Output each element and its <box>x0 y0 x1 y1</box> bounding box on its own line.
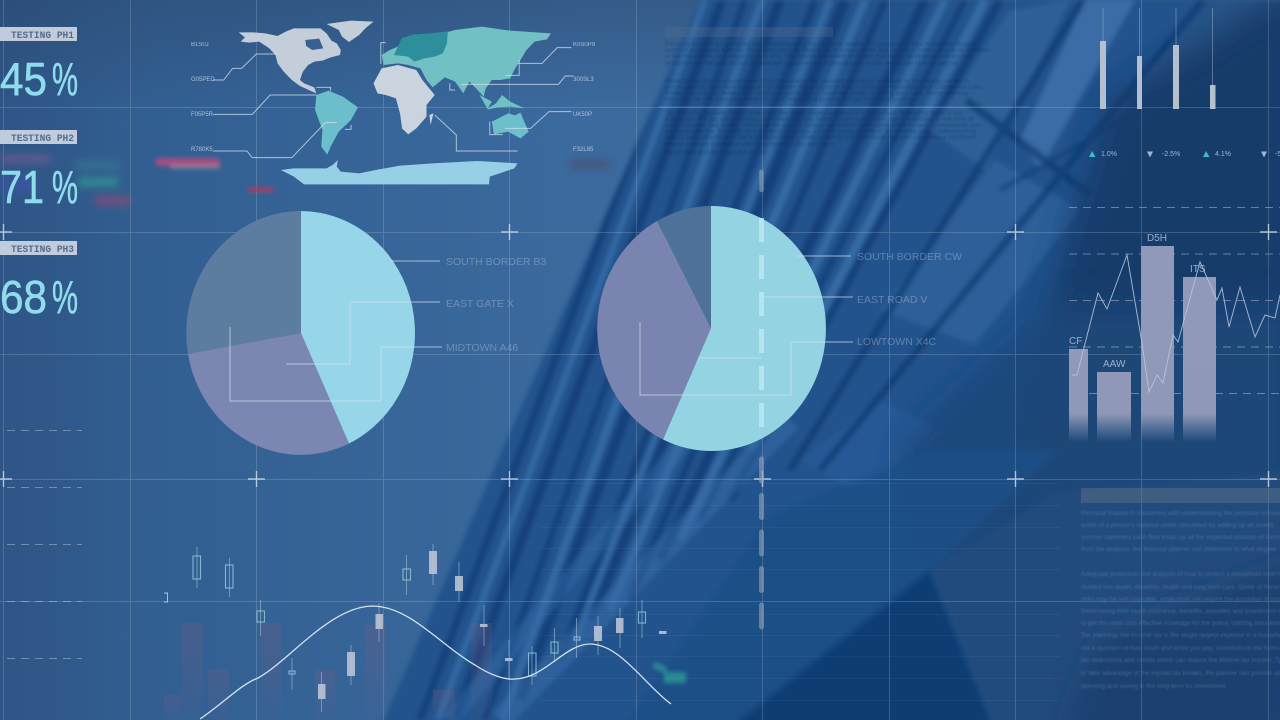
top centre text block: and household cash flow. Adequate protection: the analysis of how to protect a household from unforeseen risks <box>665 84 982 91</box>
pie chart 2 <box>597 206 962 451</box>
map labels: G05PED <box>191 77 215 83</box>
map labels: K0S0P9 <box>573 42 596 48</box>
phase 3 value <box>0 271 78 323</box>
top centre text block: a progressive tax. Typically, as one's income grows, a higher marginal rate of tax must be paid. Understanding <box>665 128 977 135</box>
top centre text block: risks may be self-insurable, while most will require the purchase of an insurance contract <box>665 96 916 103</box>
map labels: F05P5R <box>191 112 214 118</box>
left dashed scale <box>7 430 82 658</box>
phase 3 tag <box>0 241 77 256</box>
top centre text block: how to take advantage of the myriad tax breaks when planning one's personal finances can make a significant <box>665 134 976 141</box>
top right delta indicators <box>1089 151 1280 158</box>
pie 1 connectors <box>230 261 442 401</box>
top centre text block: These risks can be divided into liability, property, death, disability, health and long term care. Some of these <box>665 90 968 97</box>
top centre text block: Personal finance is concerned with understanding the personal wealth of a person and their household budget <box>665 41 976 48</box>
phase 1 value <box>0 53 78 105</box>
pie 2 connectors <box>640 256 853 395</box>
New Zealand <box>541 137 549 146</box>
top centre text block: impact in which it can later save you money in the long term <box>665 141 834 148</box>
bar labels: ITS <box>1190 264 1206 275</box>
phase 3 value: 68 <box>0 271 47 323</box>
bar labels: AAW <box>1103 359 1126 370</box>
small bracket <box>164 593 168 602</box>
pie 2 labels: SOUTH BORDER CW <box>857 251 962 263</box>
right bar and line chart <box>1069 208 1280 442</box>
phase 3 value: % <box>52 271 78 323</box>
pie chart 1 <box>186 211 547 455</box>
Antarctica <box>281 160 518 184</box>
top centre text block: of the household, at a single point in time, the income statement and cash flow totals up all expected sources <box>665 53 973 60</box>
glitch colour streaks <box>0 155 610 205</box>
bar labels: D5H <box>1147 233 1167 244</box>
top centre text block: Tax planning: typically the income tax is the single largest expense in a household. Managing taxes is not <box>665 110 962 117</box>
faded background bars <box>164 623 492 720</box>
phase 1 tag: TESTING PH1 <box>11 30 74 42</box>
North America <box>239 28 341 93</box>
slice: main light blue <box>663 206 826 451</box>
pie 2 labels <box>857 251 962 348</box>
pie 2 labels: LOWTOWN X4C <box>857 336 937 348</box>
slice: top muted <box>657 206 711 328</box>
map connector lines <box>213 43 573 158</box>
map labels: R780K5 <box>191 147 213 153</box>
top centre text block: Financial position is concerned with understanding the personal resources available by examining net worth <box>665 78 970 85</box>
pie 2 labels: EAST ROAD V <box>857 294 927 306</box>
map labels: UK50P <box>573 112 592 118</box>
dashed highlight on pie 2 <box>759 218 764 440</box>
teal glitch patch <box>652 662 686 683</box>
outlined candles <box>193 556 646 676</box>
panel: testing phases <box>0 27 78 323</box>
world map <box>191 21 596 184</box>
top centre text block: of income for the year, minus all expected expenses the financial planner can determine to what degree <box>665 60 958 67</box>
phase 1 value: 45 <box>0 53 47 105</box>
map labels <box>191 42 596 153</box>
bars <box>1069 246 1216 442</box>
phase 1 tag <box>0 27 77 42</box>
Indonesia <box>480 95 524 109</box>
top right candle bars <box>1100 8 1216 109</box>
top right delta indicators: 1.0% <box>1101 151 1117 158</box>
bottom right text block: income statement cash flow totals up all the expected sources of income <box>1081 534 1280 541</box>
solid candles <box>318 551 666 699</box>
phase 2 tag <box>0 130 77 145</box>
fluctuating line <box>1072 255 1280 392</box>
vertical dashed marker <box>759 172 764 628</box>
Australia <box>492 113 529 138</box>
map labels: F32L85 <box>573 147 594 153</box>
map labels: 300SL3 <box>573 77 594 83</box>
map labels: B1S0J <box>191 42 209 48</box>
bottom right text block: not a question of how much and when you pay; incentives in the form of <box>1081 645 1280 652</box>
bar labels: CF <box>1069 336 1082 347</box>
dashed guides <box>1069 208 1280 394</box>
phase 2 value: % <box>52 161 78 213</box>
slice: main light blue <box>301 211 415 444</box>
pie 1 labels: EAST GATE X <box>446 298 514 310</box>
slice: left lavender <box>597 221 711 440</box>
slice: top left muted <box>186 211 301 354</box>
phase 3 tag: TESTING PH3 <box>11 244 74 256</box>
bottom right text block: from the analysis, the financial planner can determine to what degree <box>1081 546 1277 553</box>
Hudson Bay <box>305 39 323 50</box>
top centre text block: investment and accumulation goals <box>665 149 765 156</box>
phase 2 value <box>0 161 78 213</box>
Africa <box>373 65 435 134</box>
Madagascar <box>429 113 433 125</box>
top right delta indicators: 4.1% <box>1215 151 1231 158</box>
bottom right text block <box>1080 488 1280 690</box>
slice: bottom left lavender <box>188 333 349 455</box>
top centre text block: tax deductions and credits, which can be used to reduce the lifetime tax burden. Most modern governments use <box>665 122 981 129</box>
bottom right text block: planning and saving in the long term for investment <box>1081 683 1226 690</box>
Greenland <box>327 21 373 42</box>
bottom right text block: FINANCE MARKET <box>1082 491 1162 501</box>
South America <box>315 91 358 155</box>
top centre text block <box>658 27 1030 156</box>
bottom right text block: divided into death, disability, health and long term care. Some of these <box>1081 584 1280 591</box>
pie 1 labels: SOUTH BORDER B3 <box>446 256 547 268</box>
pie 1 labels: MIDTOWN A46 <box>446 342 518 354</box>
top right delta indicators: -2.5% <box>1162 151 1180 158</box>
bottom candlestick chart with curve <box>164 544 686 720</box>
phase 2 value: 71 <box>0 161 44 213</box>
Europe and Russia highlight <box>394 32 448 62</box>
bottom right text block: worth of a person's balance sheet calculated by adding up all assets <box>1080 522 1274 529</box>
pie 1 labels <box>446 256 547 354</box>
bar labels <box>1069 233 1206 370</box>
top centre text block: worth of a personal balance sheet calculated by adding up all assets under that person's control, minus all liabilities <box>664 47 990 54</box>
phase 1 value: % <box>52 53 78 105</box>
Eurasia <box>382 27 551 97</box>
phase 2 tag: TESTING PH2 <box>11 133 74 145</box>
smooth curve <box>200 606 671 719</box>
candle wicks <box>197 544 642 712</box>
top centre text block: a question of if you will pay taxes, but when and how much. Government gives many incentives in the form of <box>665 116 974 123</box>
